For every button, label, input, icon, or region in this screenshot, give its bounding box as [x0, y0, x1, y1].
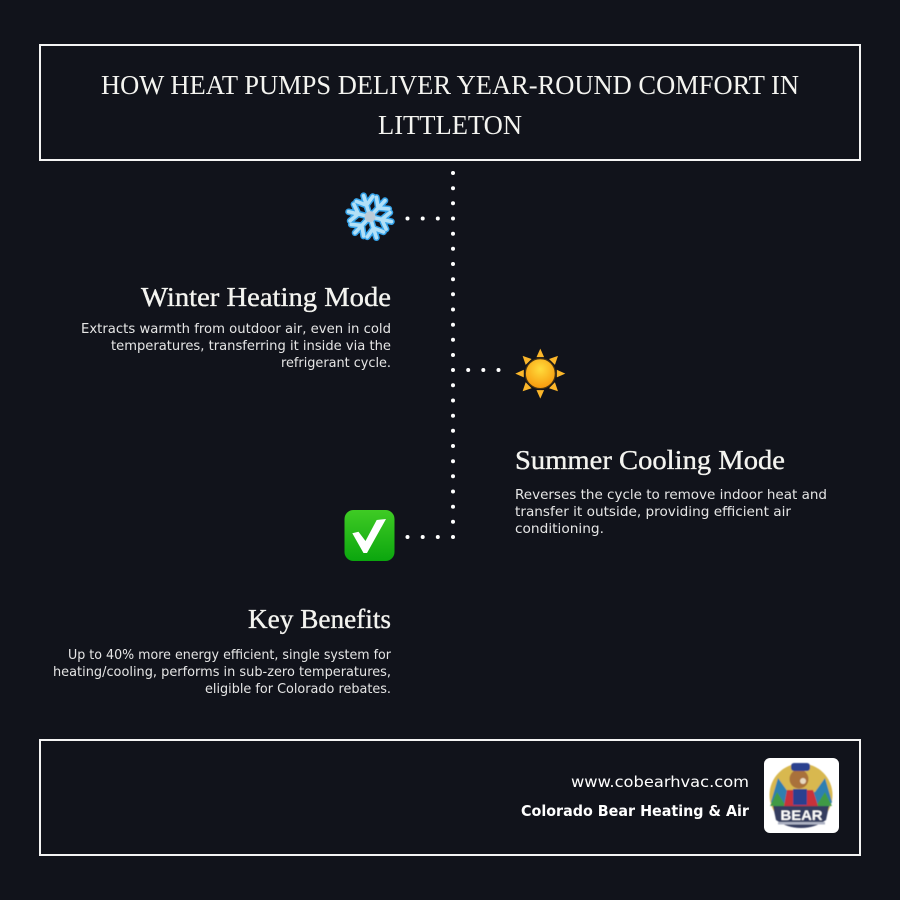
- text: benefits description: heating/cooling, performs in sub-zero temperatures,: [53, 664, 391, 680]
- icon: sun: [515, 349, 565, 399]
- text: benefits description: [53, 647, 391, 697]
- footer: website: www.cobearhvac.com: [571, 773, 749, 791]
- title box: LITTLETON: [378, 110, 522, 140]
- icon: snowflake: [341, 189, 399, 245]
- text: winter description: refrigerant cycle.: [281, 355, 391, 371]
- text: winter description: Extracts warmth from outdoor air, even in cold: [81, 321, 391, 337]
- text: summer description: [515, 487, 827, 537]
- logo: [764, 758, 839, 833]
- heading: winter heating mode: Winter Heating Mode: [141, 282, 391, 312]
- title box: HOW HEAT PUMPS DELIVER YEAR-ROUND COMFORT IN: [101, 70, 799, 100]
- logo: BEAR: [780, 807, 822, 823]
- heading: key benefits: Key Benefits: [248, 604, 391, 634]
- footer box: [40, 740, 860, 855]
- text: benefits description: Up to 40% more energy efficient, single system for: [68, 647, 391, 663]
- footer: company name: Colorado Bear Heating & Air: [521, 802, 750, 820]
- text: winter description: temperatures, transferring it inside via the: [111, 338, 391, 354]
- title box: [40, 45, 860, 160]
- text: summer description: transfer it outside, providing efficient air: [515, 504, 791, 520]
- heading: summer cooling mode: Summer Cooling Mode: [515, 445, 785, 475]
- text: benefits description: eligible for Colorado rebates.: [205, 681, 391, 697]
- icon: check mark: [344, 510, 394, 561]
- text: summer description: Reverses the cycle to remove indoor heat and: [515, 487, 827, 503]
- text: summer description: conditioning.: [515, 521, 604, 537]
- text: winter description: [81, 321, 391, 371]
